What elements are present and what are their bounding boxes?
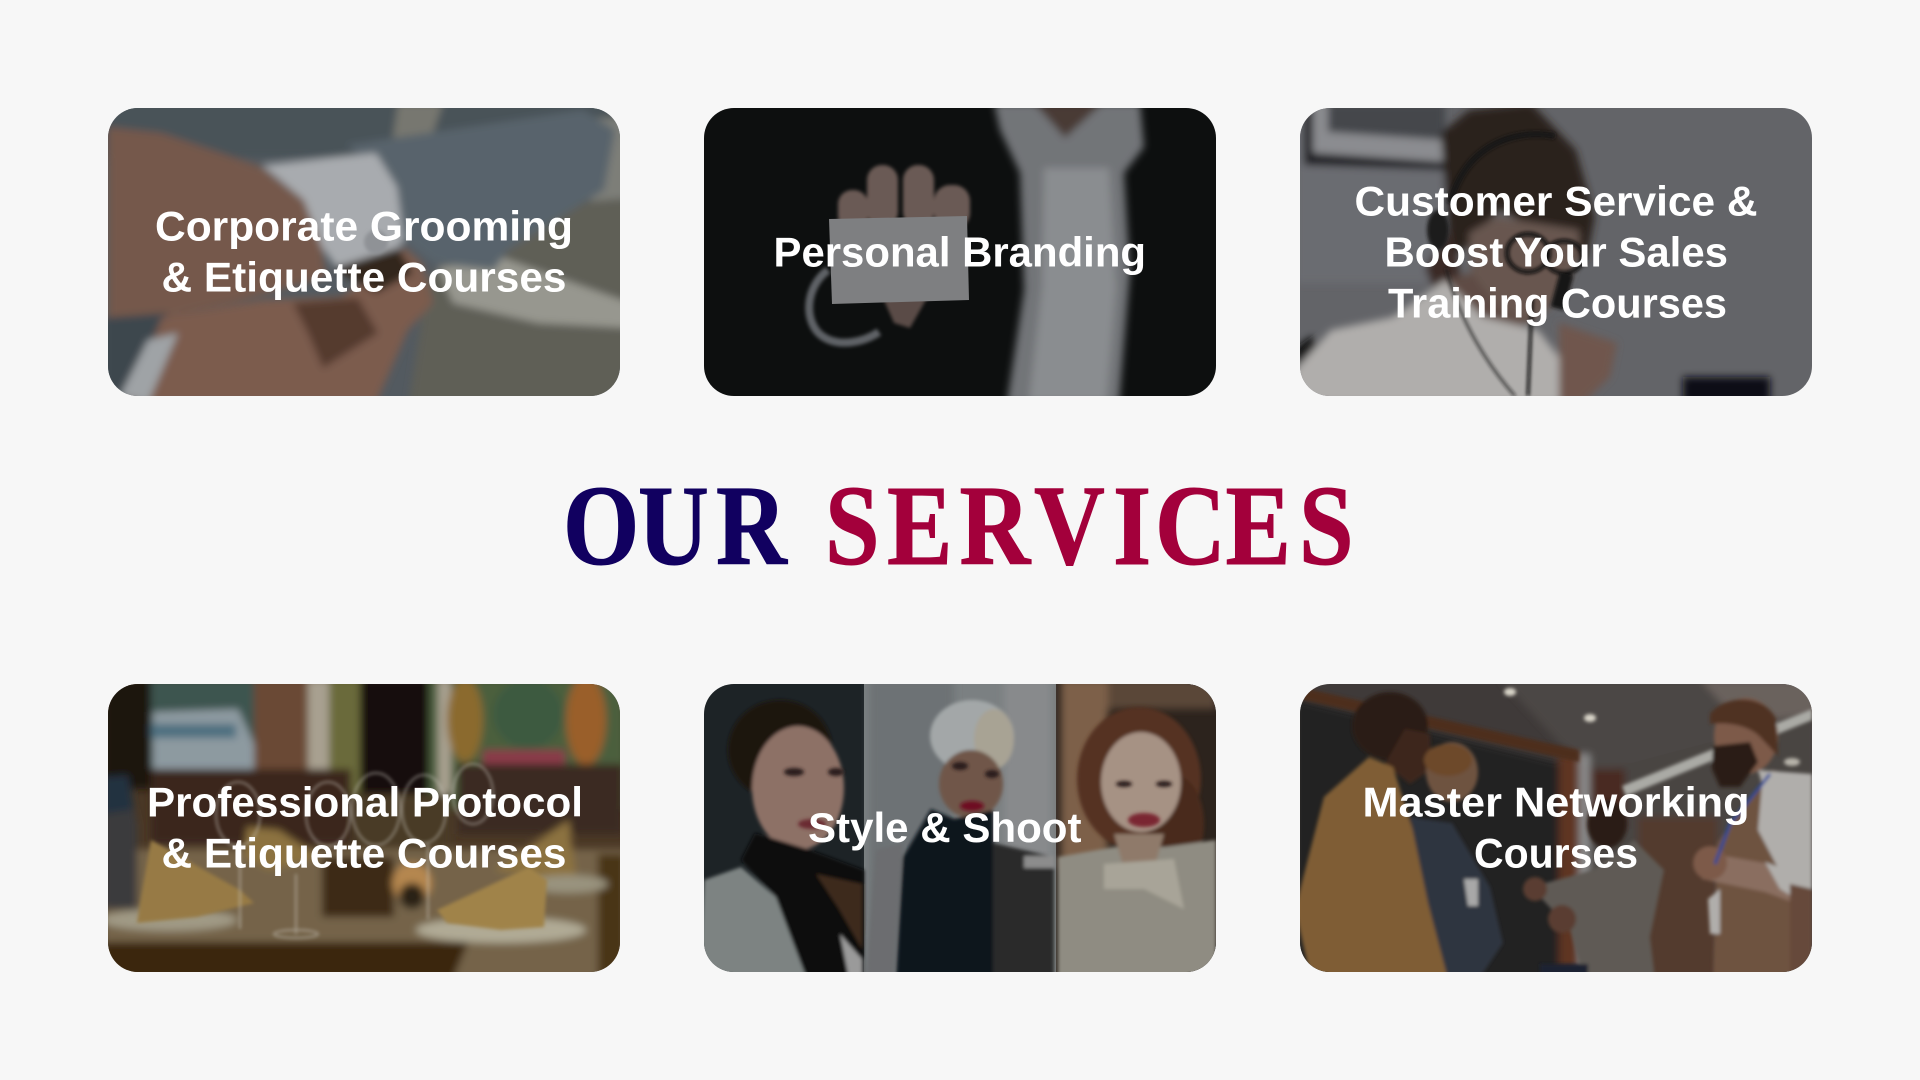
panel: style and shoot <box>699 679 1216 979</box>
services infographic canvas <box>108 108 1812 972</box>
label: professional protocol: Professional Protocol <box>147 778 583 826</box>
photo: man holding blank business card <box>704 103 1216 403</box>
label: corporate grooming: & Etiquette Courses <box>162 254 566 300</box>
label: corporate grooming: Corporate Grooming <box>155 202 573 250</box>
label: customer service: Boost Your Sales <box>1384 228 1728 276</box>
label: customer service: Training Courses <box>1388 280 1727 326</box>
label: style and shoot: Style & Shoot <box>808 804 1082 851</box>
label: personal branding: Personal Branding <box>774 228 1146 276</box>
label: corporate grooming <box>155 202 573 300</box>
panel: personal branding <box>704 103 1216 403</box>
label: master networking <box>1362 778 1750 876</box>
main title: our services: SERVICES <box>825 462 1354 589</box>
photo: cufflink and suit sleeve <box>108 108 620 396</box>
photo: restaurant table setting <box>101 675 628 979</box>
main title: our services: OUR <box>563 462 788 589</box>
main title: our services <box>563 462 1354 589</box>
photo: four men networking at an event <box>1295 679 1817 979</box>
panel: master networking <box>1295 679 1817 979</box>
panel: professional protocol <box>101 675 628 979</box>
label: master networking: Master Networking <box>1362 778 1750 826</box>
photo: three professional portraits <box>699 679 1216 979</box>
label: professional protocol: & Etiquette Courses <box>162 830 566 876</box>
panel: corporate grooming <box>108 108 620 396</box>
label: customer service: Customer Service & <box>1354 178 1758 224</box>
label: master networking: Courses <box>1474 830 1638 876</box>
label: professional protocol <box>147 778 583 876</box>
panel: customer service <box>1295 103 1812 403</box>
label: customer service <box>1354 178 1758 326</box>
photo: call centre agent with headset <box>1295 103 1812 403</box>
